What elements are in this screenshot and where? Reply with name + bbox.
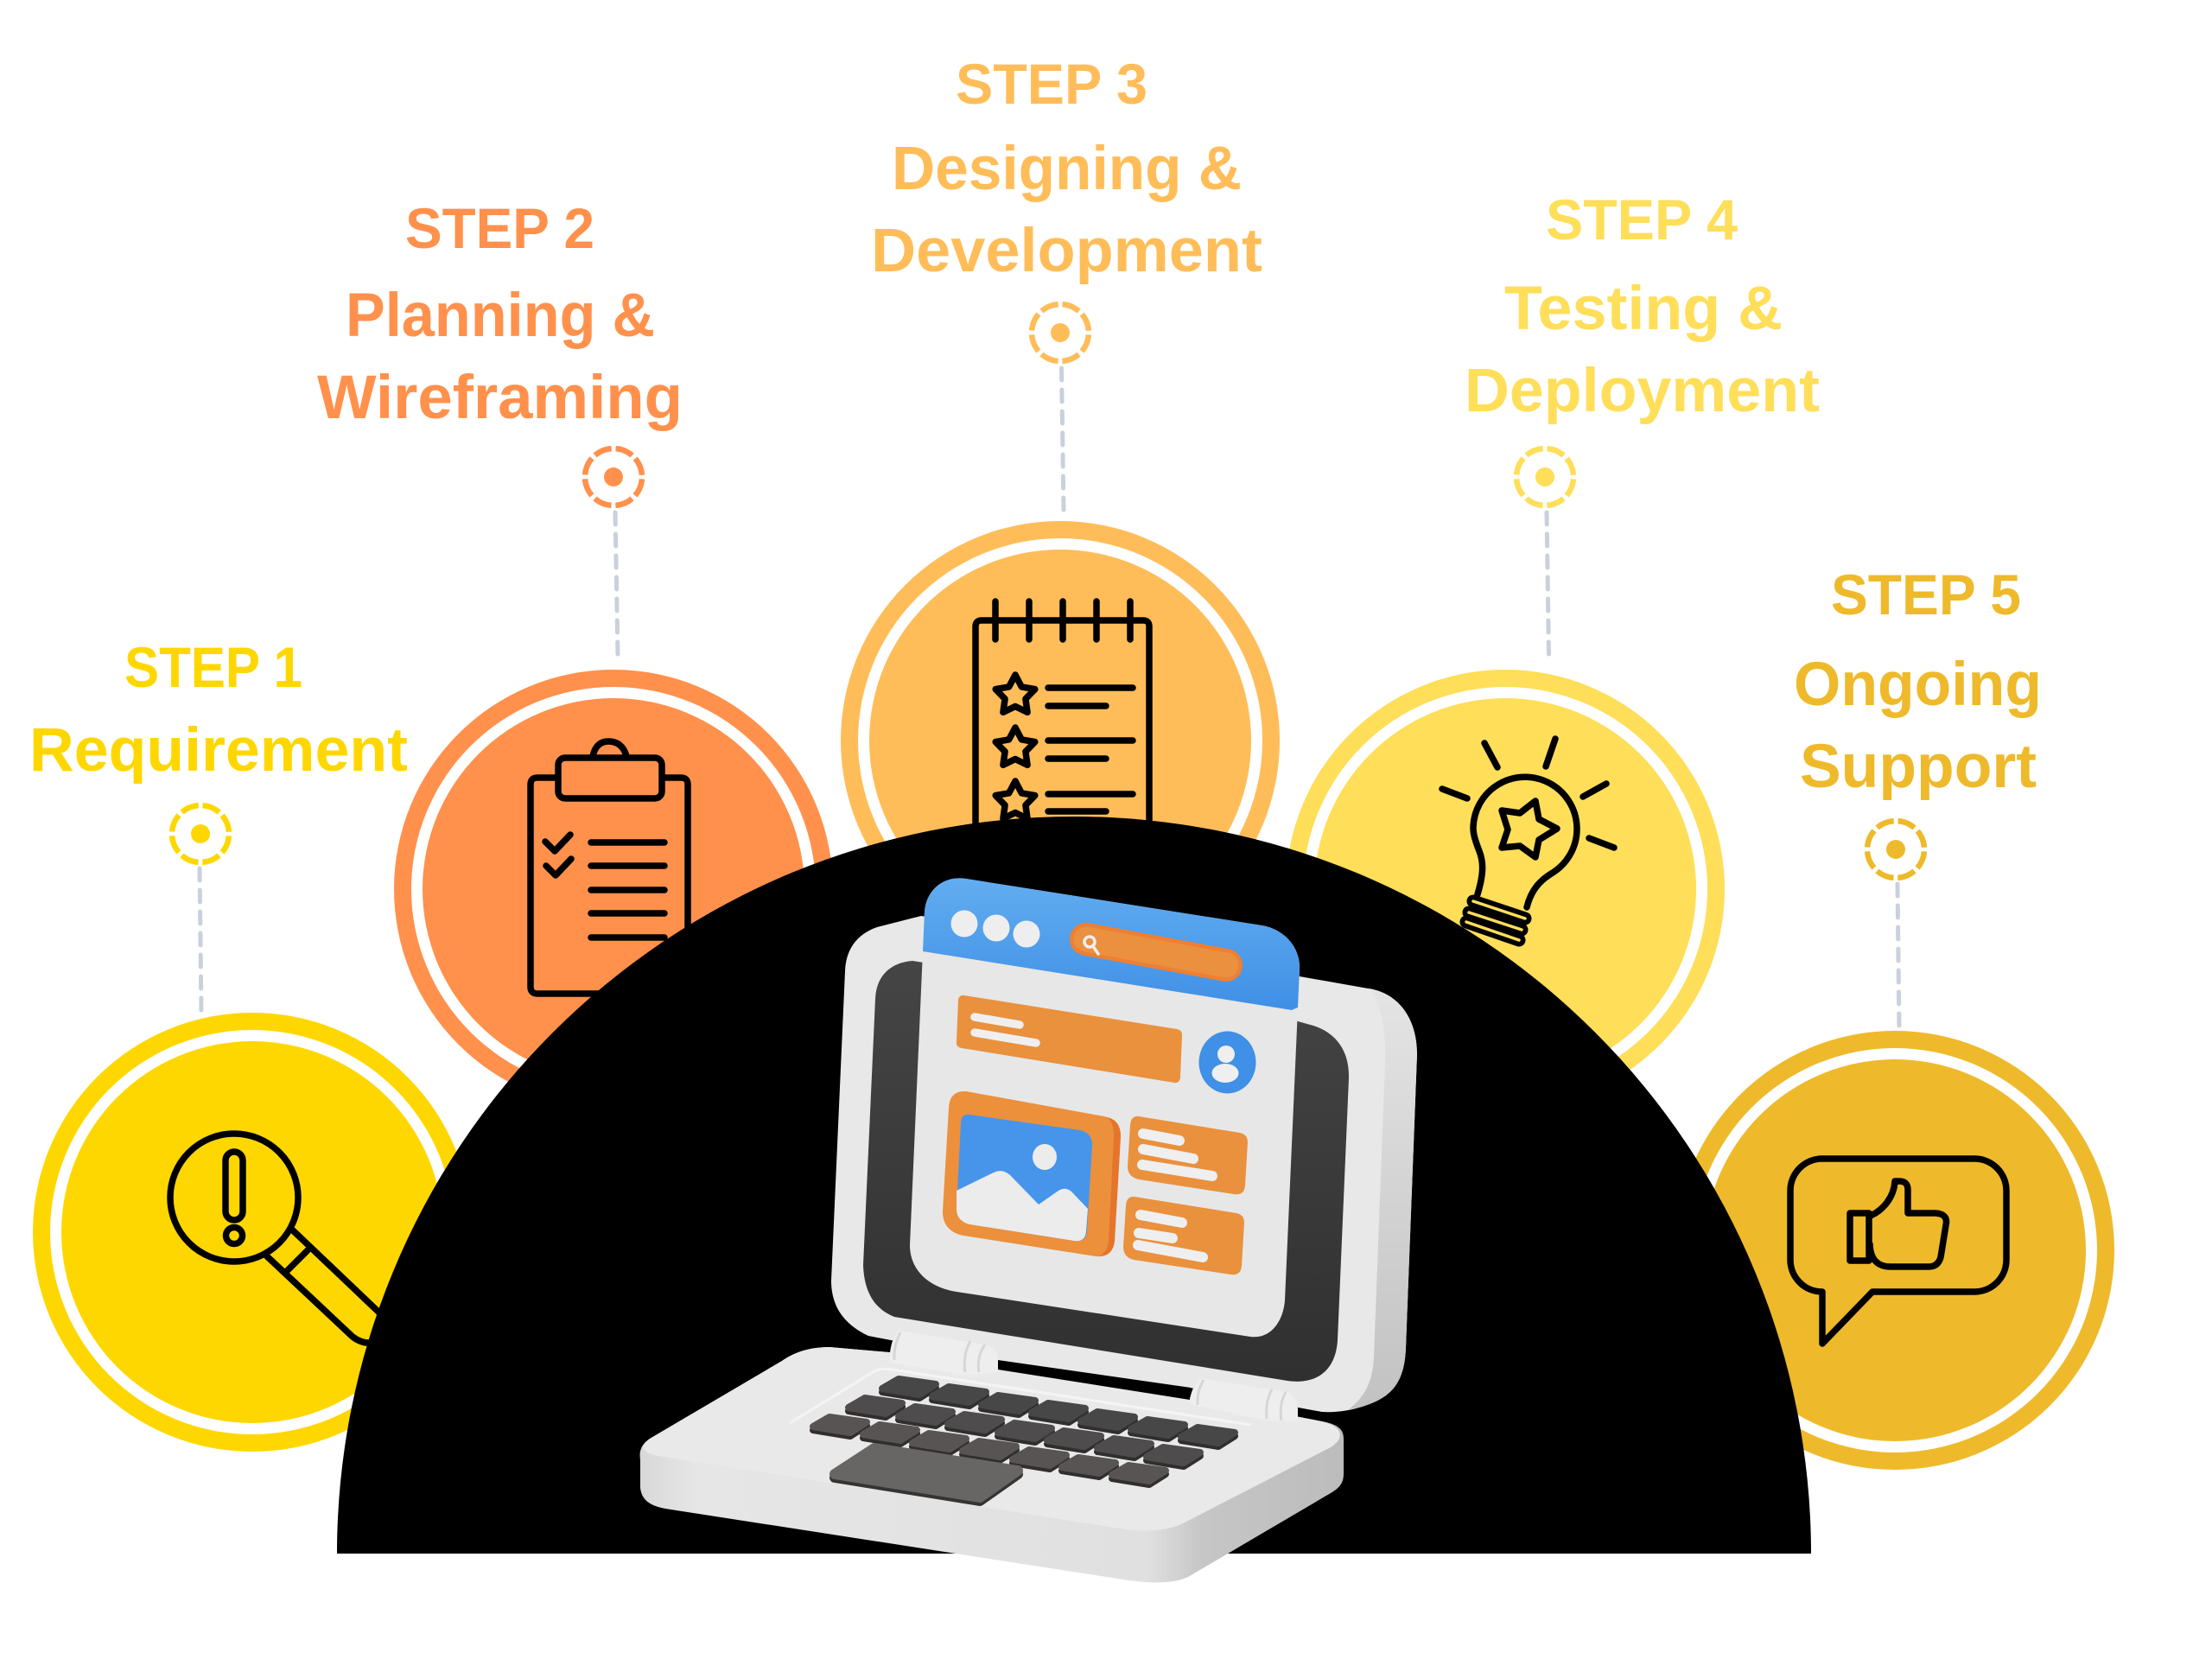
heading: step 5 [1794, 563, 2042, 801]
panel: step 4 testing and deployment [1286, 188, 1820, 1109]
user avatar [1199, 1032, 1256, 1094]
heading: step 4 [1465, 188, 1820, 425]
marker: step 4 target [1516, 448, 1573, 505]
icon: magnifying glass with exclamation [170, 1134, 401, 1343]
icon: clipboard checklist [531, 741, 688, 994]
circle: step 4 [1286, 670, 1725, 1109]
panel: step 2 planning and wireframing [317, 196, 833, 1109]
search bar [1084, 937, 1226, 965]
heading: step 2: STEP 2 [405, 196, 594, 260]
black semicircle [337, 817, 1811, 1554]
text card 2 [1123, 1197, 1244, 1274]
heading: step 5: STEP 5 [1831, 563, 2021, 626]
heading: step 2: Planning & [346, 282, 655, 350]
heading: step 2: Wireframing [317, 364, 683, 432]
text card 1 [1128, 1116, 1248, 1194]
heading: step 3 [871, 52, 1262, 285]
icon: notepad with star ratings [976, 601, 1149, 950]
connector: step 4 [1547, 512, 1548, 656]
panel: step 5 ongoing support [1675, 563, 2114, 1470]
orange banner [957, 995, 1182, 1083]
marker: step 2 target [585, 448, 642, 505]
marker: step 5 target [1867, 821, 1924, 878]
icon: light bulb with star [1442, 739, 1614, 940]
keyboard keys [813, 1379, 1235, 1484]
hinges [889, 1331, 1298, 1421]
circle: step 2 [394, 670, 833, 1109]
heading: step 4: Deployment [1465, 357, 1820, 425]
connector: step 5 [1897, 884, 1899, 1028]
heading: step 3: Designing & [892, 135, 1242, 203]
panel: step 1 requirement [29, 635, 472, 1452]
circle: step 3 [841, 521, 1280, 960]
laptop base [640, 1347, 1344, 1582]
image card [943, 1091, 1121, 1256]
icon: thumbs up speech bubble [1790, 1159, 2006, 1344]
laptop illustration [640, 878, 1417, 1582]
heading: step 1: STEP 1 [124, 635, 302, 699]
browser title bar [923, 878, 1300, 1010]
heading: step 5: Ongoing [1794, 651, 2042, 719]
heading: step 5: Support [1800, 733, 2037, 801]
connector: step 2 [615, 512, 618, 656]
laptop dark screen [863, 961, 1349, 1382]
heading: step 3: STEP 3 [956, 52, 1147, 116]
marker: step 3 target [1032, 304, 1089, 361]
window control dots [950, 911, 1040, 947]
gap between lid and base [998, 1360, 1191, 1400]
heading: step 3: Development [871, 217, 1262, 285]
marker: step 1 target [172, 805, 229, 862]
connector: step 3 [1061, 368, 1064, 512]
heading: step 1: Requirement [29, 716, 408, 785]
trackpad / spacebar [835, 1448, 1018, 1501]
heading: step 1 [29, 635, 408, 785]
laptop lid [831, 916, 1417, 1412]
heading: step 4: Testing & [1504, 275, 1783, 343]
panel: step 3 designing and development [841, 52, 1280, 960]
heading: step 2 [317, 196, 683, 432]
connector: step 1 [200, 868, 201, 1013]
circle: step 5 [1675, 1031, 2114, 1470]
circle: step 1 [33, 1013, 472, 1452]
browser window [910, 878, 1300, 1337]
heading: step 4: STEP 4 [1546, 188, 1738, 251]
